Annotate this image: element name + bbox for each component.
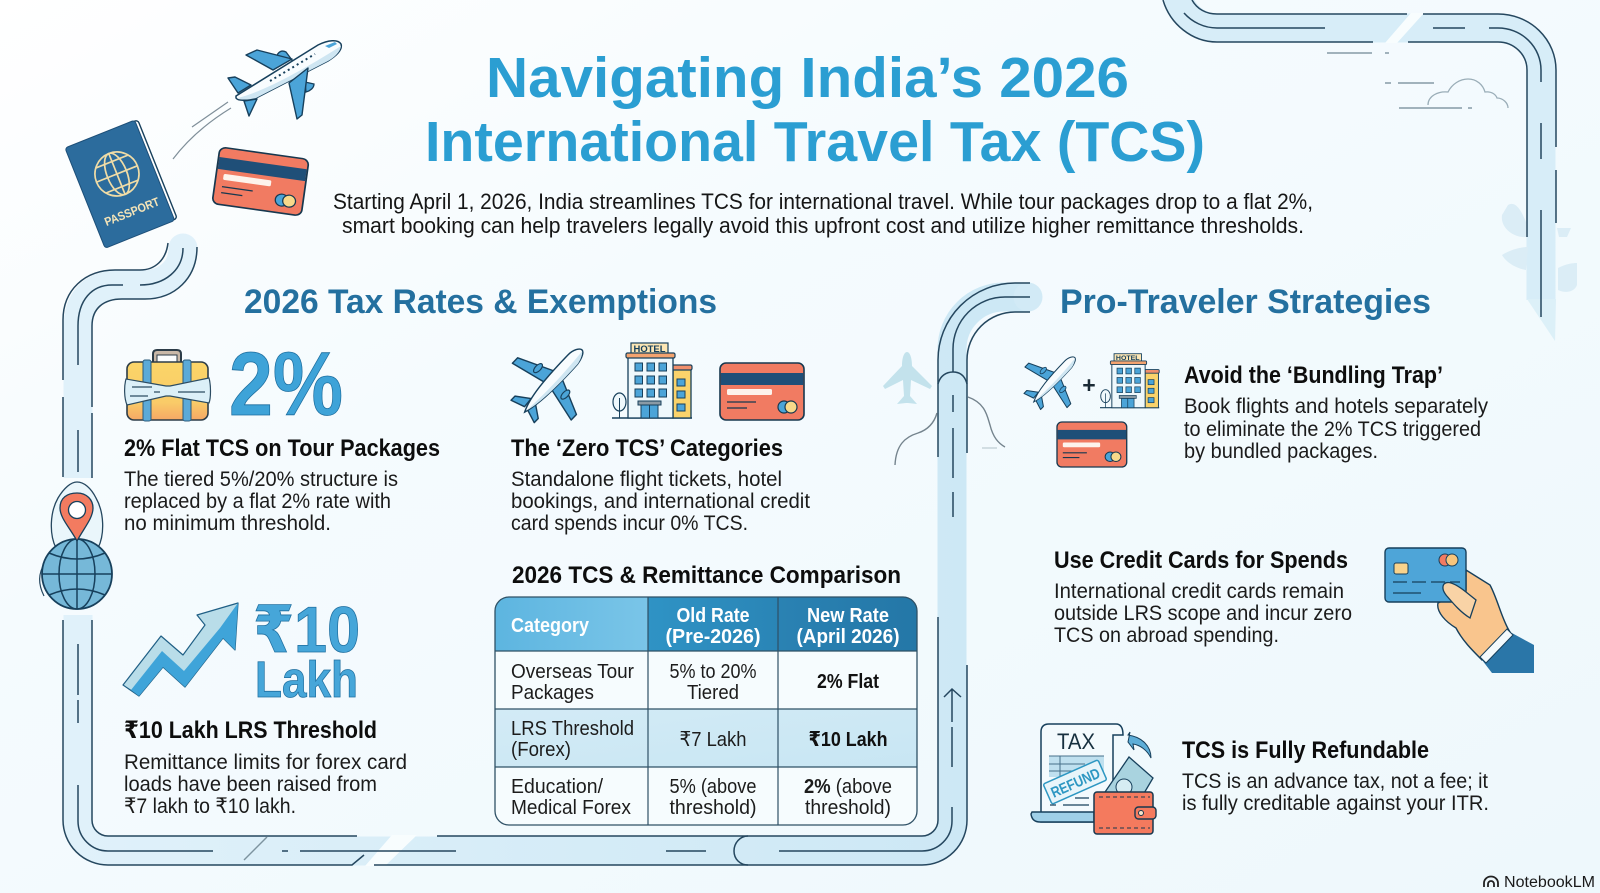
icon: credit card tilted	[212, 147, 309, 216]
intro text	[333, 189, 1313, 238]
icon: passport	[65, 119, 178, 248]
icon: plane plus hotel with card	[1011, 337, 1159, 467]
table heading: 2026 TCS & Remittance Comparison	[512, 562, 901, 589]
big 2 percent: 2%	[229, 335, 343, 435]
row: education and medical	[511, 775, 892, 819]
big 10 lakh amount: ₹10	[253, 593, 360, 666]
block: flat TCS	[124, 435, 440, 535]
title: Navigating India’s 2026	[486, 46, 1129, 110]
block: LRS threshold: ₹7 lakh to ₹10 lakh.	[124, 794, 296, 818]
NotebookLM watermark: NotebookLM	[1504, 874, 1595, 891]
icon: plane, hotel and card	[493, 322, 804, 440]
heading: strategies: Pro-Traveler Strategies	[1060, 283, 1431, 321]
icon: tax refund document and wallet: TAX	[1057, 729, 1095, 754]
row: education and medical: 2% (above	[804, 775, 892, 798]
row: LRS threshold	[511, 717, 888, 761]
block: credit cards	[1054, 547, 1352, 647]
icon: tax refund document and wallet: REFUND	[1048, 765, 1103, 802]
icon: plane plus hotel with card: +	[1082, 372, 1096, 398]
icon: globe with location pin	[40, 482, 112, 609]
block: refundable: TCS is an advance tax, not a fee; it	[1182, 769, 1488, 793]
title	[425, 46, 1205, 174]
block: refundable: is fully creditable against your ITR.	[1182, 791, 1489, 815]
row: education and medical: threshold)	[670, 796, 756, 819]
table header row	[511, 604, 900, 648]
block: zero TCS categories: The ‘Zero TCS’ Categories	[511, 435, 783, 462]
panel: 2026 tax rates and exemptions	[40, 283, 917, 825]
icon: tax refund document and wallet	[1031, 724, 1156, 834]
road: main winding route	[63, 234, 1042, 866]
icon: faded airplane	[883, 352, 932, 404]
row: education and medical: 5% (above	[670, 775, 756, 798]
block: LRS threshold: loads have been raised from	[124, 772, 377, 796]
row: LRS threshold: (Forex)	[511, 738, 571, 761]
row: LRS threshold: LRS Threshold	[511, 717, 634, 740]
heading: tax rates: 2026 Tax Rates & Exemptions	[244, 283, 717, 321]
block: zero TCS categories	[511, 435, 810, 535]
table header row: (Pre-2026)	[666, 625, 760, 648]
block: bundling trap	[1184, 362, 1488, 463]
big 10 lakh amount: Lakh	[255, 651, 358, 708]
road: top-right border	[1163, 0, 1577, 341]
comparison table	[495, 597, 917, 825]
block: credit cards: Use Credit Cards for Spends	[1054, 547, 1348, 574]
block: bundling trap: to eliminate the 2% TCS triggered	[1184, 417, 1481, 441]
row: tour packages: Packages	[511, 681, 594, 704]
row: education and medical: Medical Forex	[511, 796, 632, 819]
row: LRS threshold: ₹10 Lakh	[808, 728, 888, 751]
row: education and medical: Education/	[511, 775, 603, 798]
row: education and medical: threshold)	[805, 796, 891, 819]
icon: hand holding blue card	[1385, 548, 1534, 673]
row: LRS threshold: ₹7 Lakh	[680, 728, 746, 751]
intro text: smart booking can help travelers legally avoid this upfront cost and utilize higher remittance thresholds.	[342, 213, 1304, 238]
block: flat TCS: 2% Flat TCS on Tour Packages	[124, 435, 440, 462]
icon: passport: PASSPORT	[102, 194, 162, 229]
row: tour packages: Tiered	[687, 681, 739, 704]
block: credit cards: International credit cards remain	[1054, 579, 1344, 603]
big 10 lakh amount	[253, 593, 360, 708]
block: refundable: TCS is Fully Refundable	[1182, 737, 1429, 764]
block: credit cards: outside LRS scope and incur zero	[1054, 601, 1352, 625]
block: refundable	[1182, 737, 1489, 815]
row: tour packages	[511, 660, 879, 704]
table header row: Old Rate	[676, 604, 750, 627]
block: zero TCS categories: card spends incur 0% TCS.	[511, 511, 748, 535]
block: LRS threshold: ₹10 Lakh LRS Threshold	[124, 717, 377, 744]
row: tour packages: 5% to 20%	[670, 660, 756, 683]
icon: airplane taking off	[173, 41, 341, 159]
title: International Travel Tax (TCS)	[425, 110, 1205, 174]
table header row: (April 2026)	[796, 625, 900, 648]
block: flat TCS: no minimum threshold.	[124, 511, 331, 535]
row: tour packages: Overseas Tour	[511, 660, 634, 683]
block: flat TCS: The tiered 5%/20% structure is	[124, 467, 398, 491]
table header row: New Rate	[807, 604, 889, 627]
icon: rising arrow	[123, 603, 238, 696]
panel: pro-traveler strategies	[1011, 283, 1534, 834]
intro text: Starting April 1, 2026, India streamlines TCS for international travel. While tour packages drop to a flat 2%,	[333, 189, 1313, 214]
table header row: Category	[511, 614, 590, 637]
block: bundling trap: by bundled packages.	[1184, 439, 1378, 463]
block: LRS threshold: Remittance limits for forex card	[124, 750, 407, 774]
row: tour packages: 2% Flat	[817, 670, 879, 693]
block: bundling trap: Book flights and hotels separately	[1184, 394, 1488, 418]
block: flat TCS: replaced by a flat 2% rate with	[124, 489, 391, 513]
block: zero TCS categories: bookings, and international credit	[511, 489, 810, 513]
block: LRS threshold	[124, 717, 407, 818]
icon: bound suitcase	[125, 350, 210, 421]
block: bundling trap: Avoid the ‘Bundling Trap’	[1184, 362, 1443, 389]
block: zero TCS categories: Standalone flight tickets, hotel	[511, 467, 782, 491]
block: credit cards: TCS on abroad spending.	[1054, 623, 1279, 647]
